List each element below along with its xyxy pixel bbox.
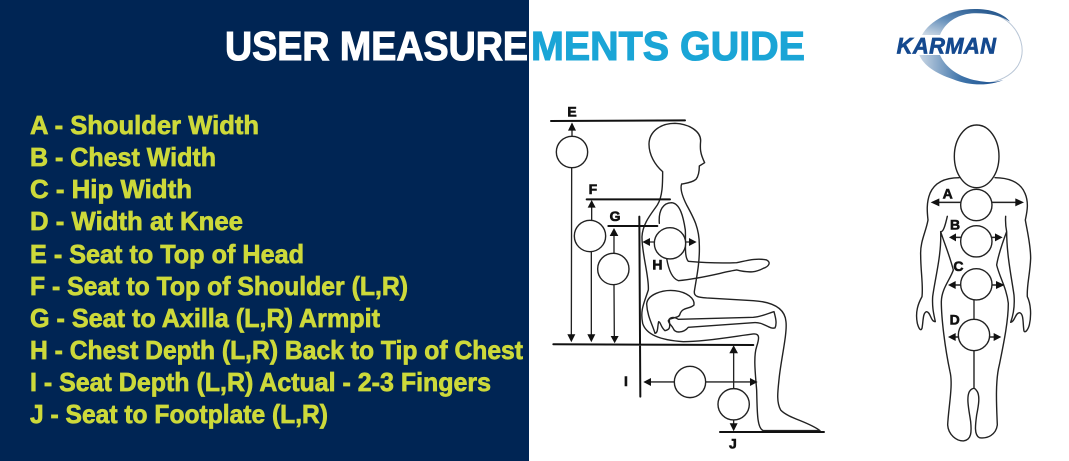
thin outer ellipse: [948, 10, 1022, 83]
letter labels: H: [652, 256, 662, 272]
legend: measurement list: A - Shoulder Width: [30, 110, 259, 140]
pelvis: [647, 290, 694, 333]
dimension lines: [937, 202, 1017, 337]
reference lines: [551, 120, 824, 432]
lower swoosh: [919, 55, 1003, 84]
body outline left: [917, 178, 974, 441]
letter labels: D: [950, 311, 960, 327]
legend: measurement list: I - Seat Depth (L,R) Actual - 2-3 Fingers: [30, 367, 491, 397]
letter labels: G: [610, 208, 621, 224]
letter labels: I: [624, 373, 628, 389]
dimension lines: [571, 130, 752, 425]
arrowheads: [567, 122, 758, 431]
panel: navy legend background: [0, 0, 529, 461]
title: USER MEASURE: [225, 23, 528, 69]
logo: Karman: KARMAN: [897, 33, 997, 58]
letter labels: J: [729, 436, 737, 452]
legend: measurement list: J - Seat to Footplate (L,R): [30, 399, 328, 429]
arm: [659, 203, 769, 281]
diagram: seated side-view figure: [551, 104, 824, 452]
logo: Karman: [897, 9, 1022, 84]
legend: measurement list: G - Seat to Axilla (L,R) Armpit: [30, 303, 380, 333]
measuring circles: [961, 189, 992, 221]
letter labels: B: [950, 216, 960, 232]
legend: measurement list: C - Hip Width: [30, 174, 192, 204]
legend: measurement list: B - Chest Width: [30, 142, 216, 172]
letter labels: [943, 185, 963, 327]
body outline right: [974, 178, 1031, 438]
legend: measurement list: F - Seat to Top of Shoulder (L,R): [30, 271, 408, 301]
title: MENTS GUIDE: [531, 23, 805, 69]
legend: measurement list: E - Seat to Top of Head: [30, 239, 304, 269]
legend: measurement list: H - Chest Depth (L,R) Back to Tip of Chest: [30, 335, 523, 365]
centre line: [972, 300, 976, 319]
femur: [668, 312, 776, 332]
body outline: [642, 123, 820, 431]
diagram: front-view figure: [917, 125, 1031, 441]
legend: measurement list: D - Width at Knee: [30, 206, 243, 236]
letter labels: C: [953, 258, 963, 274]
upper swoosh: [922, 9, 1010, 35]
letter labels: E: [567, 104, 577, 120]
title: [225, 23, 805, 69]
legend: measurement list: [30, 110, 523, 429]
measuring circles: [556, 136, 588, 168]
arrowheads: [931, 198, 1024, 341]
head: [954, 125, 999, 188]
letter labels: [567, 104, 737, 452]
letter labels: F: [589, 181, 598, 197]
letter labels: A: [943, 185, 953, 201]
